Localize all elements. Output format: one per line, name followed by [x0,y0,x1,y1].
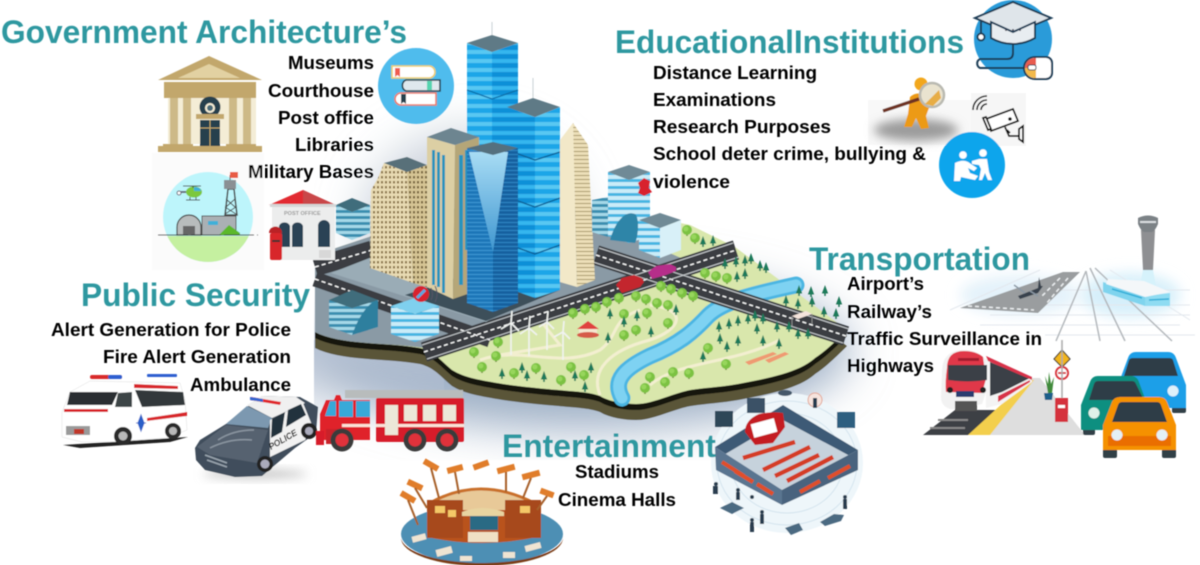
icon: books in blue circle [378,48,454,124]
text: transportation list: Railway’s [847,302,932,322]
panel: isometric smart city island [315,22,849,420]
background shadow under city [310,130,850,430]
text: public security list: Alert Generation for Police [51,320,291,340]
icon: orange car [1103,397,1176,458]
tower: tan with blue stripes [427,128,479,299]
icon: CCTV camera with wifi [971,93,1026,146]
text: government list: Post office [278,108,374,128]
carousel [577,321,599,338]
cars on road [616,264,676,293]
icon: ambulance [62,374,188,448]
roads [315,243,849,359]
icon: post office [269,190,336,260]
text: entertainment list: Cinema Halls [558,490,676,510]
heading: Entertainment: Entertainment [502,428,716,464]
wind turbines [501,311,570,360]
city plaza block [331,215,596,322]
icon: road signs and planter [1044,340,1070,422]
icon: cinema security floorplan [711,390,863,535]
text: government list [248,53,374,182]
heading: Transportation: Transportation [809,241,1030,277]
heading: Government Architecture's: Government Architecture’s [1,14,407,50]
icon: stadium with cameras [400,458,563,565]
small buildings front left [329,290,378,335]
icon: graduation cap and mouse [974,0,1052,79]
faint image tile behind military base [152,153,264,270]
city plaza ground [315,200,735,348]
icon: red pin on building [638,178,652,196]
small buildings left [336,198,370,240]
small buildings back right [592,165,681,258]
text: entertainment list [558,462,676,510]
roadside sign and flower beds [745,311,812,365]
icon: military base [158,172,260,266]
icon: police car [195,396,318,479]
text: government list: Military Bases [248,162,374,182]
icon: blue car [1118,352,1186,413]
icon: red alarm on building [413,286,437,302]
text: public security list [51,320,291,395]
tower: central dark blue [467,142,518,312]
text: education list: Examinations [653,90,776,110]
text: education list: School deter crime, bullying & [653,144,926,164]
text: transportation list: Airport’s [847,274,924,294]
icon: figure with magnifier [868,78,971,145]
icon: fire truck [316,390,464,452]
icon: police car: POLICE [267,427,300,452]
text: transportation list [847,274,1042,376]
icon: train and platform [923,350,1085,435]
icon: bullying in blue circle [939,132,1005,198]
island base [315,200,847,420]
text: public security list: Fire Alert Generation [103,347,291,367]
text: government list: Libraries [295,135,374,155]
text: education list: Research Purposes [653,117,831,137]
tower: stacked blue [507,78,560,298]
icon: museum [158,56,262,152]
heading: Educational Institutions: EducationalInstitutions [615,24,964,60]
river [619,285,796,398]
tower: cream spire [560,123,595,287]
heading: Public Security: Public Security [81,277,310,313]
text: education list: violence [653,172,730,192]
text: transportation list: Highways [847,356,934,376]
tower: beige office [370,157,427,287]
text: transportation list: Traffic Surveillance in [847,329,1042,349]
icon: airport [950,216,1195,341]
text: education list [653,63,926,192]
text: education list: Distance Learning [653,63,817,83]
trees: round [469,225,732,394]
text: entertainment list: Stadiums [575,462,659,482]
trees: pines [499,235,842,392]
text: public security list: Ambulance [190,375,291,395]
icon: teal car [1081,376,1150,435]
icon: post office: POST OFFICE [284,211,321,217]
text: government list: Courthouse [268,81,374,101]
tower: tall blue back [467,22,518,150]
text: government list: Museums [288,53,374,73]
park paths [480,305,780,395]
